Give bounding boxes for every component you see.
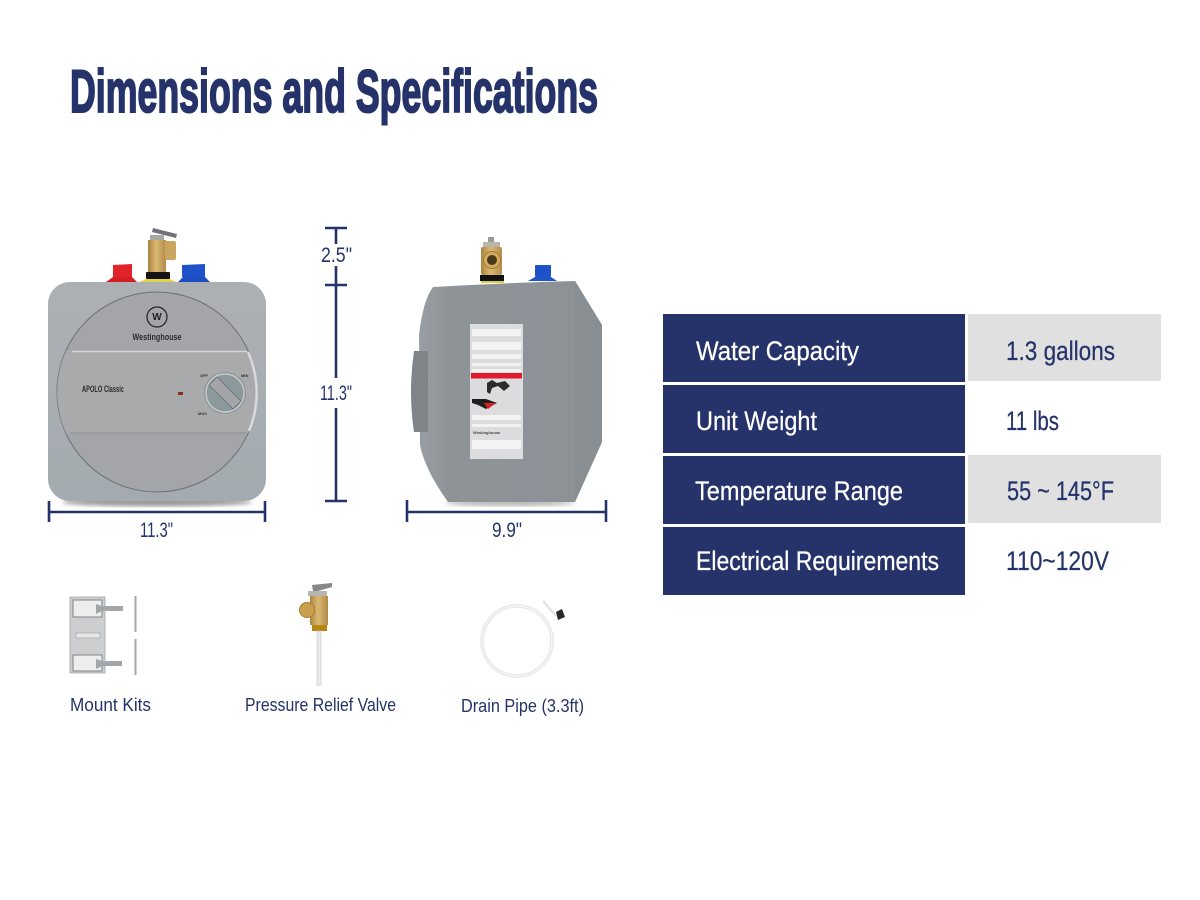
- temperature dial: MAX: [198, 411, 207, 416]
- accessory: mount kits: Mount Kits: [70, 695, 151, 715]
- row: electrical requirements: Electrical Requirements: [696, 546, 939, 576]
- accessory: mount kits: [70, 596, 151, 715]
- front dial panel: [57, 292, 257, 492]
- row: electrical requirements: 110~120V: [1006, 546, 1109, 576]
- icon: hot water inlet: [106, 264, 137, 282]
- row: electrical requirements: [663, 527, 1109, 595]
- row: temperature range: Temperature Range: [695, 476, 903, 506]
- width dimension: side: [407, 500, 606, 542]
- front view of water heater: [48, 228, 266, 506]
- side view of water heater: [411, 237, 602, 506]
- icon: cold inlet side: [528, 265, 557, 281]
- row: unit weight: 11 lbs: [1006, 406, 1059, 436]
- model name: APOLO Classic: [82, 384, 124, 394]
- logo: W: [152, 312, 162, 323]
- temperature dial: MIN: [241, 373, 248, 378]
- specifications table: [663, 314, 1161, 595]
- row: temperature range: [663, 455, 1161, 524]
- row: water capacity: Water Capacity: [696, 336, 859, 366]
- height dimensions: 11.3": [320, 382, 352, 405]
- accessory: drain pipe: [461, 601, 584, 716]
- icon: valve side: [480, 237, 504, 283]
- accessory: pressure relief valve: Pressure Relief Valve: [245, 695, 396, 715]
- icon: bracket: [70, 596, 136, 675]
- height dimensions: [320, 228, 352, 501]
- side body: [419, 281, 602, 502]
- row: water capacity: 1.3 gallons: [1006, 336, 1115, 366]
- warning label: [470, 324, 523, 459]
- accessory: pressure relief valve: [245, 583, 396, 715]
- row: unit weight: [663, 385, 1059, 453]
- icon: valve: [300, 583, 332, 685]
- temperature dial: [198, 372, 248, 416]
- icon: cold water inlet: [178, 264, 210, 282]
- icon: coiled pipe: [482, 601, 565, 676]
- accessory: drain pipe: Drain Pipe (3.3ft): [461, 696, 584, 716]
- unit body: [48, 282, 266, 501]
- row: temperature range: 55 ~ 145°F: [1007, 476, 1114, 506]
- width dimension: front: 11.3": [140, 519, 173, 542]
- height dimensions: 2.5": [321, 244, 352, 267]
- temperature dial: OFF: [200, 373, 209, 378]
- width dimension: side: 9.9": [492, 519, 522, 542]
- logo: Westinghouse: [132, 332, 182, 343]
- indicator light: [178, 392, 183, 395]
- logo: [132, 307, 182, 343]
- width dimension: front: [49, 501, 265, 542]
- row: unit weight: Unit Weight: [696, 406, 817, 436]
- icon: pressure valve: [137, 228, 178, 283]
- title: Dimensions and Specifications: [70, 58, 598, 125]
- row: water capacity: [663, 314, 1161, 382]
- knob bump: [411, 351, 428, 432]
- warning label: Westinghouse: [473, 430, 501, 435]
